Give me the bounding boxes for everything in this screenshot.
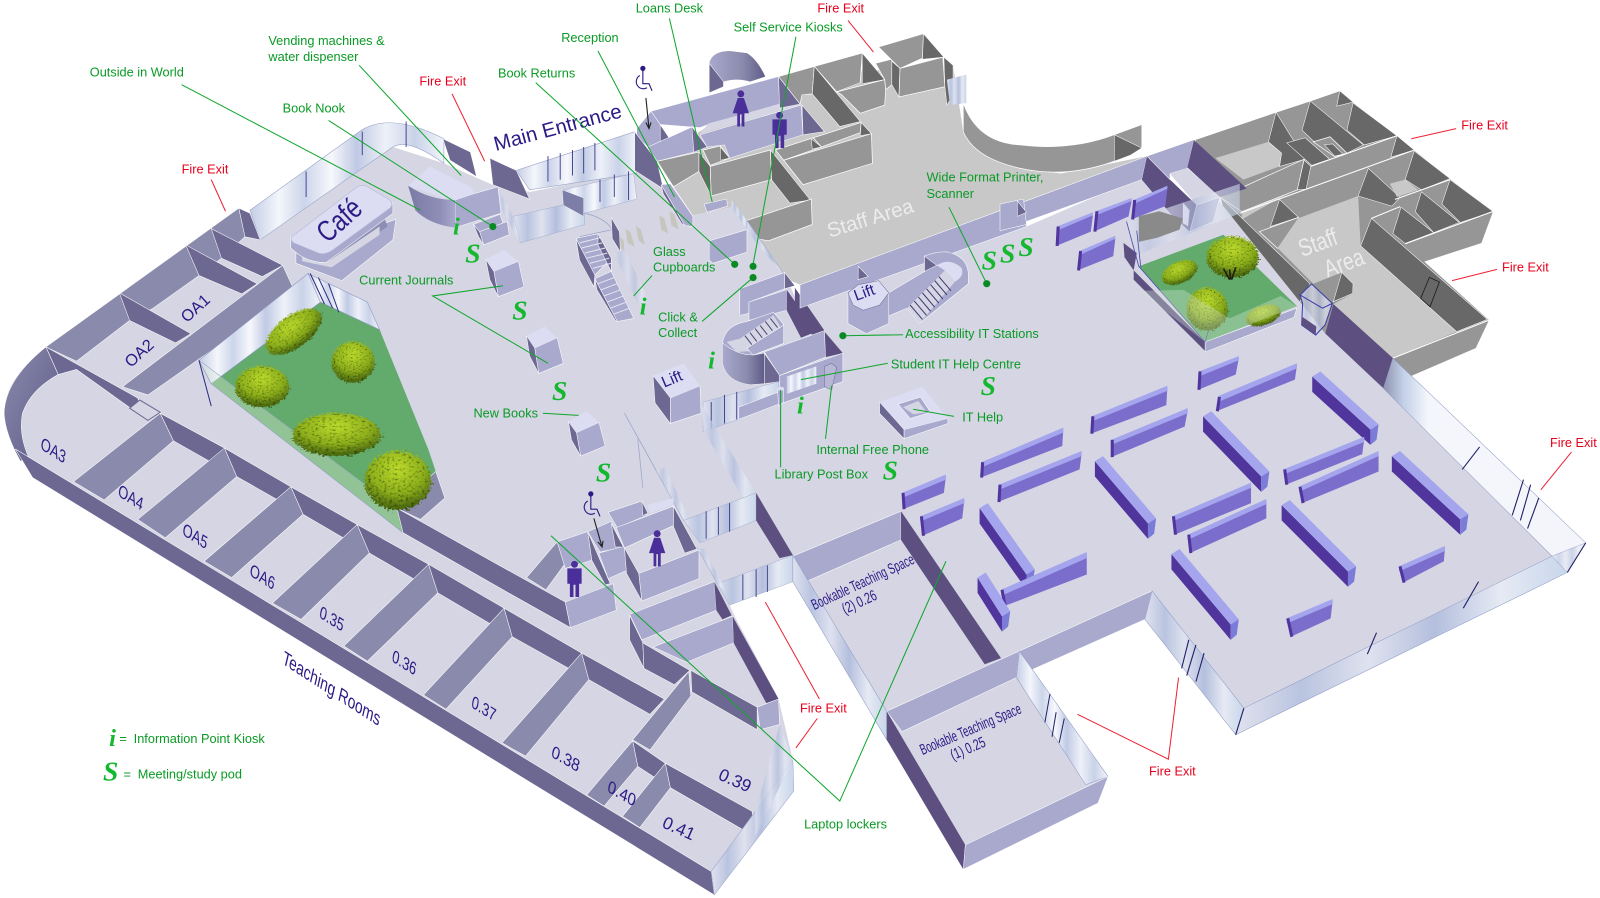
partition at curved wall end [1114,135,1142,161]
tree [293,413,381,456]
trunk [1223,267,1236,280]
green labels [90,0,1043,832]
courtyard garden right [1123,184,1332,352]
tree [235,366,289,407]
lower corridor walls [630,582,780,730]
glass mullions [306,121,629,202]
green labels: New Books [473,405,538,420]
OA rooms wing [4,208,755,837]
map symbols: pods and kiosks: S [596,457,611,488]
room labels: 0.36 [390,647,418,680]
map caption: Main Entrance: Main Entrance [492,101,624,156]
legend: Information Point Kiosk [134,731,265,746]
icon: man toilet [772,112,787,148]
green labels: Vending machines & [268,33,385,48]
red labels: Fire Exit [817,0,865,15]
room labels: OA3 [39,435,67,468]
room labels: OA1 [177,291,214,326]
map caption: Staff Area right: Staff [1294,223,1342,262]
café [291,185,396,281]
map symbols: pods and kiosks: S [465,237,481,268]
green labels: Book Returns [498,66,575,81]
icon: woman toilet [649,530,665,566]
red labels: Fire Exit [182,161,229,176]
red labels: Fire Exit [1550,435,1597,450]
room label: Bookable Teaching Space [808,550,917,613]
glass wall: café curve [250,123,444,240]
icon: woman toilet [733,90,749,127]
legend: Meeting/study pod [138,767,242,782]
room labels: OA5 [181,520,209,554]
tree [258,300,330,364]
green labels: Scanner [927,186,975,201]
lift and stairs right [848,252,968,334]
room labels: OA6 [248,561,276,595]
bookable teaching space 1 [887,651,1108,869]
bookable teaching space 2 [793,511,1001,740]
map symbols: pods and kiosks: S [1000,237,1015,268]
tree [332,342,375,383]
pod: current journals 2 [527,327,563,373]
green labels: Outside in World [90,65,184,80]
lift label: Lift [659,367,686,391]
room labels: OA2 [121,336,158,371]
map symbols: pods and kiosks: i [453,214,460,241]
room labels [39,291,755,844]
teaching wing outer wall [15,449,714,895]
map symbols: pods and kiosks: S [1018,231,1034,262]
courtyard garden left [199,273,570,628]
icon: man toilet [567,561,582,597]
curved staff wall [963,103,1142,172]
tree [1158,255,1201,290]
study desks: along south-east [980,371,1468,640]
pod: current journals 1 [486,250,524,297]
green labels: Library Post Box [774,467,869,482]
map caption: Staff Area right: Area [1320,243,1369,283]
red labels: Fire Exit [1461,118,1508,133]
teaching wing glass end [711,725,794,895]
room labels: 0.39 [716,764,755,796]
study desk: short south-east [978,572,1010,632]
legend: = [119,731,127,746]
lift label: Lift [852,281,878,305]
glass east walls [1145,358,1586,735]
room labels: 0.35 [318,603,346,636]
room labels: 0.38 [549,742,582,776]
glass cupboards [619,211,679,252]
green labels: Student IT Help Centre [891,356,1021,371]
lift centre [653,363,701,423]
staff wing: rooms left [657,34,1147,285]
map symbols: pods and kiosks: i [708,347,715,374]
icon: wheelchair top [636,66,652,129]
stairs centre [576,217,649,321]
green labels: Loans Desk [636,0,704,15]
staff wall strip [800,140,1247,308]
glass strips mid [624,404,793,605]
room labels: OA4 [116,482,145,515]
tree [365,451,431,510]
kiosk wall [709,230,747,263]
dark wall pieces by entrance [239,139,584,240]
tree [1207,237,1259,278]
restrooms upper block [635,51,824,227]
green labels: Glass [653,244,686,259]
study desks: along north-east [902,186,1445,637]
green labels: Click & [658,309,698,324]
map symbols: pods and kiosks: i [797,392,804,419]
room label: (2) 0.26 [839,586,879,617]
IT help desk [880,387,948,439]
green labels: Cupboards [653,259,715,274]
tree [1243,300,1283,330]
floor: library main floor [5,147,1552,871]
icon: wheelchair lower [584,492,603,547]
room label: (1) 0.25 [948,733,988,763]
leader lines red [211,20,1571,759]
legend [103,725,265,787]
green labels: water dispenser [267,49,359,64]
map symbols: pods and kiosks: S [981,370,996,401]
lower right wall segments [1014,591,1152,678]
green labels: Self Service Kiosks [734,20,843,35]
red labels: Fire Exit [419,74,467,89]
arc glass by stair [580,213,613,237]
map symbols: pods and kiosks: S [552,375,567,406]
tree [1186,288,1228,331]
map symbols: pods and kiosks: S [883,455,898,486]
café label: Café [310,191,369,249]
legend: = [123,767,131,782]
red labels: Fire Exit [1502,259,1549,274]
pod: new books [568,411,605,456]
map symbols: pods and kiosks: S [512,294,528,325]
map caption: Staff Area left: Staff Area [825,195,917,243]
green labels: Current Journals [359,273,453,288]
green labels: Accessibility IT Stations [905,326,1039,341]
green labels: Laptop lockers [804,817,887,832]
room label: Bookable Teaching Space [917,701,1024,758]
legend: S [103,756,118,787]
map caption: Staff Area right [1294,223,1369,283]
green labels: IT Help [962,409,1003,424]
green labels: Internal Free Phone [816,442,929,457]
green labels: Wide Format Printer, [927,170,1043,185]
red labels [182,0,1597,779]
glass wall: inner lobby [498,173,637,243]
legend: i [109,725,116,752]
green labels: Collect [658,325,698,340]
green labels: Book Nook [283,100,346,115]
staff wing: right grey block [1195,91,1493,388]
room labels: 0.41 [659,812,698,844]
leader lines green [182,18,990,801]
outside in world block [408,166,509,245]
map symbols: pods and kiosks [453,214,1034,488]
room labels: 0.40 [606,776,638,811]
lower restroom block [527,498,699,628]
map caption: Teaching Rooms: Teaching Rooms [281,646,383,731]
centre building walls [703,272,843,432]
red labels: Fire Exit [1149,764,1196,779]
green labels: Reception [561,30,619,45]
room labels: 0.37 [470,693,498,726]
map symbols: pods and kiosks: S [982,244,997,275]
map symbols: pods and kiosks: i [640,293,647,320]
red labels: Fire Exit [800,700,847,715]
glass wall: main entrance [516,132,637,190]
